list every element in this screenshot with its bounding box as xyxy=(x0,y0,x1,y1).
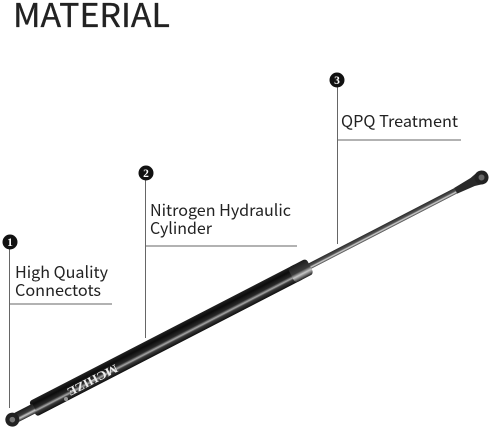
piston rod xyxy=(308,186,462,269)
callout 3 xyxy=(330,72,461,244)
gas strut xyxy=(2,167,492,430)
callout 2: 2 xyxy=(143,168,149,180)
cylinder end connector xyxy=(3,402,38,429)
callout 3: QPQ Treatment xyxy=(341,108,458,132)
callout 2: Cylinder xyxy=(150,215,213,239)
callout 1: 1 xyxy=(7,237,13,249)
callout 1 xyxy=(2,234,112,408)
callout 1: Connectots xyxy=(15,277,101,301)
callout 3: 3 xyxy=(334,75,340,87)
cylinder end collar xyxy=(287,258,314,283)
callout 2: Nitrogen Hydraulic xyxy=(150,197,291,221)
brand logo: MCHIZE xyxy=(65,361,120,399)
cylinder body xyxy=(29,263,304,417)
callout 2 xyxy=(138,166,297,338)
small logo mark xyxy=(64,397,68,401)
rod end connector xyxy=(453,168,491,197)
callout 1: High Quality xyxy=(15,259,109,283)
